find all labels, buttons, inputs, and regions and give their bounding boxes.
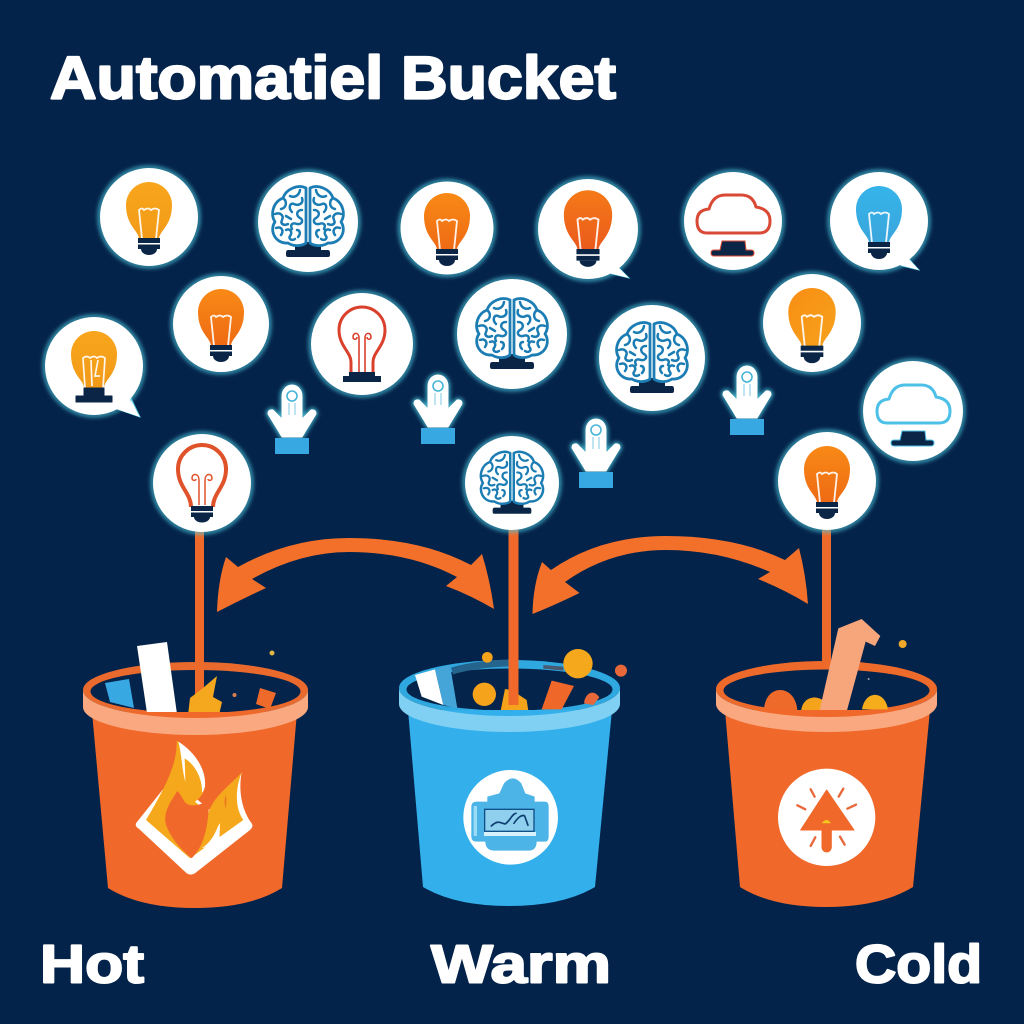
bucket contents (415, 649, 627, 711)
title: Automatiel Bucket (50, 44, 616, 112)
label: cold: Cold (855, 934, 982, 994)
bucket contents (764, 619, 907, 712)
label: hot: Hot (40, 934, 144, 994)
panel: hot bucket (83, 530, 308, 908)
panel: cold bucket (716, 530, 937, 907)
icon: cyan cloud (862, 360, 964, 462)
bucket body (725, 710, 930, 907)
panel: warm bucket (399, 530, 627, 906)
icon: red-orange bulb speech bubble (538, 178, 638, 280)
icon: amber bulb (100, 168, 198, 266)
icon: flame emblem (136, 741, 253, 875)
bucket body (408, 710, 612, 906)
bucket contents (105, 642, 276, 714)
back rim shadow (452, 663, 515, 671)
connector line (508, 530, 518, 705)
icon: orange bulb (172, 276, 270, 372)
icon: blue bulb speech bubble (830, 172, 928, 270)
icon: red outline bulb on hot line (152, 434, 252, 532)
icon: orange bulb (400, 181, 494, 275)
connector line (822, 530, 831, 670)
icon: brain on warm line (464, 436, 560, 530)
icon: brain (598, 304, 706, 412)
flame in bucket (188, 676, 222, 715)
icon: amber bulb speech bubble (44, 316, 144, 417)
icon: monitor emblem (463, 770, 558, 865)
arrow: warm to cold double arrow (532, 536, 808, 614)
bucket band (399, 688, 620, 732)
icon: hand (268, 385, 316, 454)
icon: brain (456, 278, 568, 390)
icon: hand (414, 375, 462, 444)
icon: up arrow emblem (778, 769, 875, 866)
icon: red cloud (684, 172, 782, 270)
bucket rim back (83, 662, 308, 718)
icon: red outline bulb (310, 292, 414, 396)
arrow: hot to warm double arrow (217, 538, 494, 612)
bucket body (92, 712, 297, 908)
icon: brain (258, 172, 358, 272)
connector line (195, 530, 204, 700)
bucket rim back (399, 660, 620, 716)
bucket rim back (716, 661, 937, 717)
icon: hand (572, 419, 620, 488)
icon: orange bulb on cold line (778, 432, 876, 530)
icon: amber-orange bulb (762, 274, 862, 372)
icon: hand (723, 366, 771, 435)
label: warm: Warm (431, 934, 611, 994)
bucket band (716, 689, 937, 732)
bucket band (83, 690, 308, 735)
